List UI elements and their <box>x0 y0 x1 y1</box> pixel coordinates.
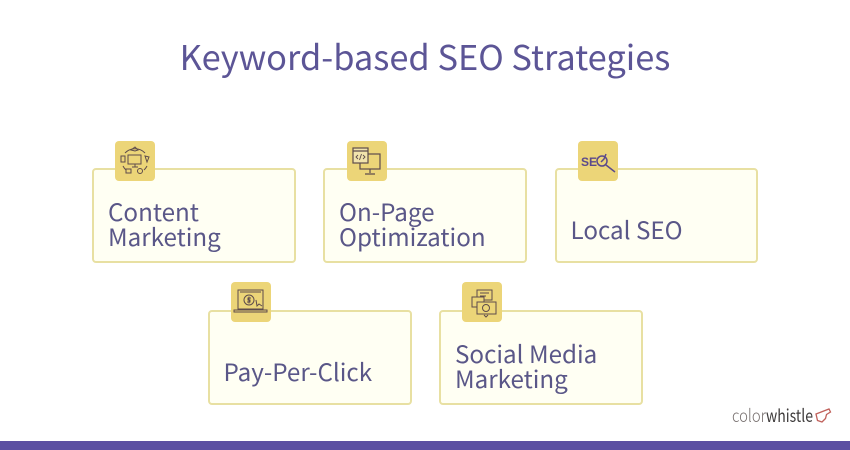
label: Social Media Marketing <box>455 335 597 395</box>
label: Social Media Marketing: Marketing <box>455 360 568 395</box>
label: Local SEO: Local SEO <box>570 211 683 246</box>
label: Content Marketing <box>108 193 221 253</box>
icon: content marketing <box>115 141 155 181</box>
icon: on-page optimization <box>347 141 387 181</box>
label: Social Media Marketing: Social Media <box>455 335 597 370</box>
title: Keyword-based SEO Strategies <box>180 30 670 80</box>
label: On-Page Optimization <box>339 193 486 253</box>
footer bar <box>0 441 850 450</box>
icon: SEO magnifier <box>578 141 618 181</box>
label: Content Marketing: Content <box>108 193 199 228</box>
panel: On-Page Optimization <box>323 168 526 262</box>
icon: pay-per-click laptop <box>231 282 271 322</box>
panel: Social Media Marketing <box>439 310 642 404</box>
icon: social media chat <box>462 282 502 322</box>
label: Content Marketing: Marketing <box>108 218 221 253</box>
panel: Pay-Per-Click <box>208 310 412 404</box>
label: On-Page Optimization: On-Page <box>339 193 435 228</box>
label: Pay-Per-Click: Pay-Per-Click <box>224 353 372 388</box>
icon: SEO magnifier: SE <box>581 155 597 169</box>
panel: Content Marketing <box>92 168 296 262</box>
label: On-Page Optimization: Optimization <box>339 218 486 253</box>
panel: Local SEO <box>554 168 758 262</box>
logo: colorwhistle <box>732 404 832 428</box>
icon: whistle <box>816 409 830 422</box>
